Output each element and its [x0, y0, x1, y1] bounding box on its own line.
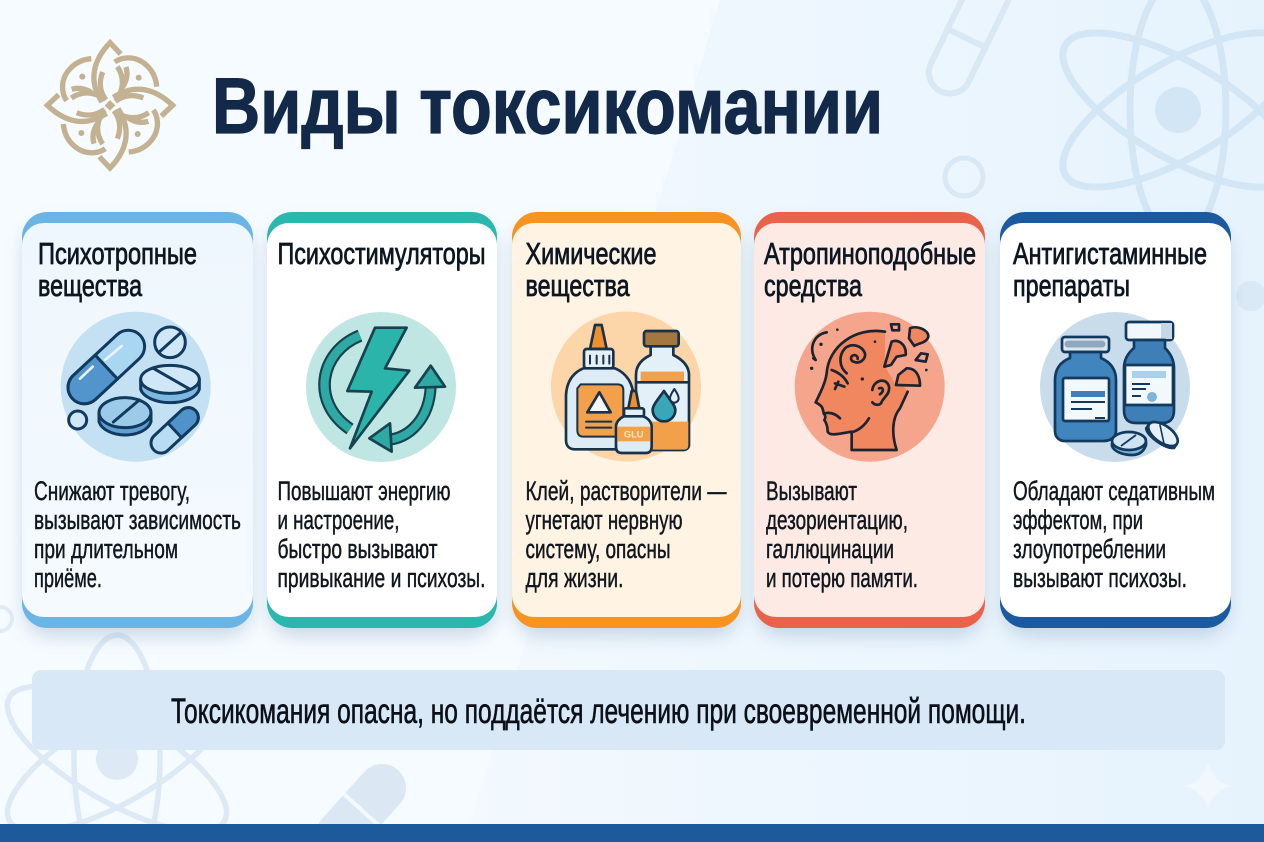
icon: medicine bottles: [1040, 312, 1190, 462]
description: для жизни.: [526, 563, 624, 593]
description: и потерю памяти.: [766, 563, 918, 593]
heading: [764, 236, 976, 303]
description: злоупотреблении: [1013, 534, 1166, 564]
description: [278, 476, 486, 593]
heading: вещества: [526, 268, 630, 303]
panel: атропиноподобные средства: [754, 212, 985, 636]
icon: glue and solvent bottles: GLU: [624, 430, 644, 440]
description: [766, 476, 918, 593]
heading: [526, 236, 656, 303]
heading: средства: [764, 268, 863, 303]
icon: head with fragments: [795, 312, 945, 462]
panel: психостимуляторы: [267, 212, 497, 636]
description: эффектом, при: [1013, 505, 1143, 535]
background ring: [945, 158, 983, 196]
background capsule top: [922, 0, 1017, 101]
description: вызывают зависимость: [34, 505, 241, 535]
logo: [47, 43, 173, 168]
description: при длительном: [34, 534, 178, 564]
heading: Атропиноподобные: [764, 236, 976, 271]
background capsule bottom: [307, 754, 416, 842]
heading: препараты: [1013, 268, 1130, 303]
background atom top right: [1041, 0, 1264, 240]
heading: Психостимуляторы: [278, 236, 486, 271]
icon: glue and solvent bottles: [551, 312, 701, 462]
description: и настроение,: [278, 505, 400, 535]
description: привыкание и психозы.: [278, 563, 486, 593]
description: угнетают нервную: [526, 505, 682, 535]
description: [526, 476, 727, 593]
description: галлюцинации: [766, 534, 894, 564]
description: [1013, 476, 1215, 593]
title: Виды токсикомании: [212, 61, 883, 150]
description: Вызывают: [766, 476, 857, 506]
icon: lightning and arrows: [306, 312, 456, 462]
description: Повышают энергию: [278, 476, 450, 506]
heading: вещества: [38, 268, 143, 303]
panel: химические вещества: [512, 212, 741, 636]
heading: Антигистаминные: [1013, 236, 1207, 271]
heading: [38, 236, 197, 303]
description: приёме.: [34, 563, 102, 593]
heading: Химические: [526, 236, 656, 271]
background atom bottom left: [0, 635, 246, 842]
callout: [32, 670, 1225, 750]
background ring left: [0, 607, 12, 631]
background dot right: [1236, 281, 1264, 311]
description: быстро вызывают: [278, 534, 438, 564]
heading: [1013, 236, 1207, 303]
description: вызывают психозы.: [1013, 563, 1187, 593]
bottom bar: [0, 824, 1264, 842]
description: дезориентацию,: [766, 505, 908, 535]
description: Клей, растворители —: [526, 476, 727, 506]
description: систему, опасны: [526, 534, 670, 564]
heading: Психотропные: [38, 236, 197, 271]
panel: антигистаминные препараты: [1000, 212, 1231, 636]
description: [34, 476, 241, 593]
panel: психотропные вещества: [22, 212, 253, 636]
background sparkle: [1184, 763, 1232, 810]
icon: pills: [61, 312, 211, 462]
description: Снижают тревогу,: [34, 476, 190, 506]
